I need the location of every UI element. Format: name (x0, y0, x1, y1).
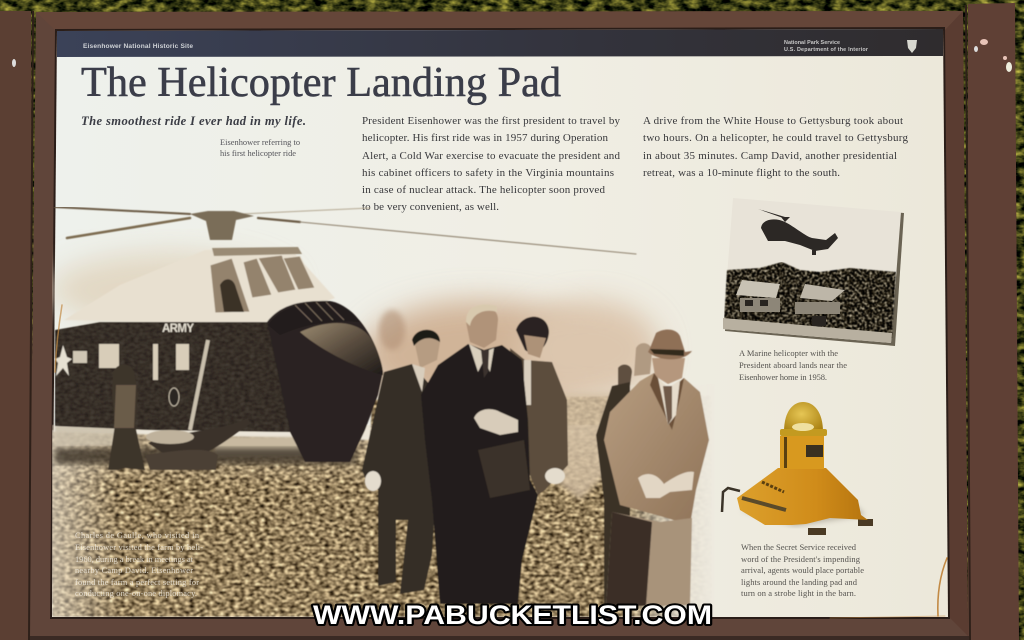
caption over field, white (75, 531, 203, 598)
man behind Eisenhower (596, 343, 652, 605)
icon: portable strobe light in yellow bag (722, 402, 873, 535)
caption over field, white: Charles de Gaulle, who visited in (75, 531, 200, 540)
caption: inset photo: A Marine helicopter with the (739, 348, 838, 358)
door emblem (169, 388, 179, 406)
strap (722, 488, 740, 512)
tabs (808, 519, 873, 535)
left post (0, 11, 33, 640)
tan suit jacket (604, 373, 709, 525)
photo haze background (360, 300, 600, 410)
skirt (737, 468, 868, 525)
watermark: WWW.PABUCKETLIST.COM (313, 600, 712, 630)
caption: strobe light: word of the President's impending (741, 554, 861, 564)
rotor hub (190, 211, 254, 240)
text block: right column: in about 35 minutes. Camp David, another presidential (643, 150, 897, 162)
wheel and gear (146, 424, 248, 470)
man at rear (510, 317, 568, 495)
caption: strobe light: lights around the landing pad and (741, 577, 858, 587)
main photo: helicopter and leaders (50, 207, 715, 620)
field (52, 385, 715, 620)
helicopter silhouette (758, 209, 838, 255)
helicopter (55, 207, 636, 470)
text block: middle column: to be very convenient, as well. (362, 201, 499, 213)
header: agency: U.S. Department of the Interior (784, 47, 869, 53)
inset photo: helicopter over Eisenhower home (723, 198, 904, 346)
cylinder (780, 436, 824, 469)
trousers (606, 512, 692, 606)
rotor blades (55, 207, 636, 254)
caption: strobe light: arrival, agents would place portable (741, 565, 864, 575)
header: agency: National Park Service (784, 40, 840, 46)
caption: strobe light: turn on a strobe light in the barn. (741, 588, 856, 598)
star insignia (55, 345, 72, 376)
quote attribution (220, 138, 300, 158)
text block: middle column: in case of nuclear attack. The helicopter soon proved (362, 184, 606, 196)
pilot (220, 279, 244, 312)
right post (968, 3, 1019, 640)
ground crewman (108, 364, 145, 470)
text block: middle column (362, 115, 620, 213)
nose vents (310, 302, 359, 323)
quote attribution: Eisenhower referring to (220, 138, 300, 147)
caption over field, white: 1960, during a break in meetings at (75, 555, 194, 564)
header: agency (784, 40, 869, 53)
fedora (648, 330, 692, 359)
icon: NPS arrowhead (907, 40, 917, 53)
Eisenhower (604, 330, 709, 606)
text block: middle column: his cabinet officers to safety in the Virginia mountains (362, 167, 614, 179)
caption: inset photo: President aboard lands near the (739, 360, 847, 370)
treeline and house (723, 262, 896, 343)
caption over field, white: Eisenhower visited the farm by heli- (75, 543, 203, 552)
photo shadow (725, 200, 904, 346)
support strut (190, 340, 208, 430)
distant trees (379, 310, 405, 350)
ARMY label: ARMY (162, 323, 194, 335)
bag shadow (740, 505, 865, 526)
caption over field, white: found the farm a perfect setting for (75, 578, 199, 587)
title: The Helicopter Landing Pad (81, 59, 561, 106)
nose panel (300, 323, 383, 375)
text block: right column: two hours. On a helicopter, he could travel to Gettysburg (643, 132, 908, 144)
pale and dark grass bands beneath helicopter (215, 437, 307, 457)
text block: right column (643, 115, 908, 179)
caption: inset photo: Eisenhower home in 1958. (739, 372, 827, 382)
caption: strobe light: When the Secret Service received (741, 542, 857, 552)
quote attribution: his first helicopter ride (220, 149, 296, 158)
quote (81, 114, 306, 158)
upper white fuselage (64, 248, 335, 324)
caption over field, white: nearby Camp David. Eisenhower (75, 566, 193, 575)
rust at panel edges (55, 305, 947, 618)
dark fuselage (55, 301, 383, 462)
caption over field, white: conducting one-on-one diplomacy. (75, 589, 197, 598)
header bar (57, 29, 943, 57)
man at centre: tall general (421, 305, 538, 604)
caption: inset photo (739, 348, 847, 382)
text block: right column: A drive from the White House to Gettysburg took about (643, 115, 903, 127)
text block: middle column: President Eisenhower was the first president to travel by (362, 115, 620, 127)
side windows (99, 344, 189, 380)
text block: middle column: helicopter. His first ride was in 1957 during Operation (362, 132, 608, 144)
cockpit windows (210, 255, 315, 313)
paint chips on post (12, 39, 1012, 72)
dome (784, 402, 823, 432)
photo sky (723, 198, 901, 343)
text block: right column: retreat, was a 10-minute flight to the south. (643, 167, 840, 179)
header: site name: Eisenhower National Historic Site (83, 43, 193, 50)
quote: The smoothest ride I ever had in my life. (81, 114, 306, 128)
man at left (362, 330, 445, 594)
text block: middle column: Alert, a Cold War exercise to evacuate the president and (362, 150, 620, 162)
caption: strobe light (741, 542, 864, 598)
